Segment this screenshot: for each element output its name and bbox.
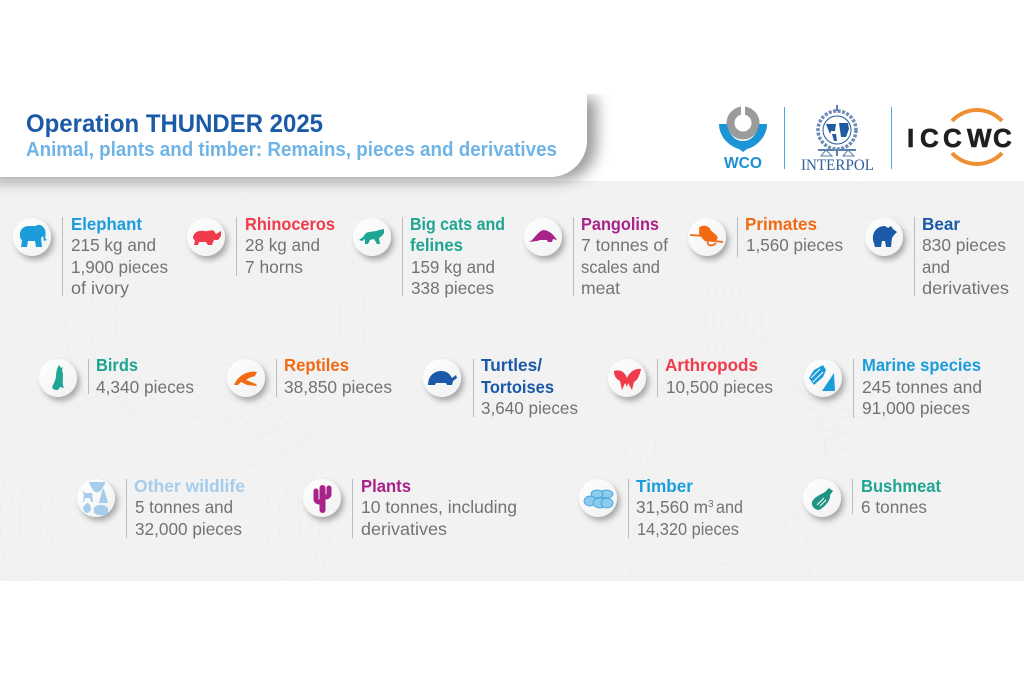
value: 31,560 m (636, 497, 708, 517)
value: 3 (708, 499, 714, 510)
label: Tortoises (481, 377, 554, 397)
icon: butterfly (614, 369, 641, 390)
divider (472, 359, 474, 417)
value (636, 497, 743, 539)
label: Turtles/ (481, 355, 542, 375)
item: Marine species (804, 355, 982, 418)
divider (402, 217, 404, 296)
label: Rhinoceros (245, 214, 335, 234)
value: derivatives (922, 278, 1009, 298)
divider (572, 217, 574, 296)
label: Marine species (862, 355, 981, 375)
value: 1,560 pieces (746, 235, 843, 255)
value: derivatives (361, 519, 447, 539)
icon: pangolin (529, 230, 557, 242)
icon: primate (690, 227, 723, 245)
value (71, 235, 168, 298)
value: 4,340 pieces (96, 377, 194, 397)
icon: elephant (20, 225, 47, 247)
label: Bear (922, 214, 960, 234)
icon: bird (52, 365, 64, 390)
logo: WCO: WCO (724, 155, 762, 172)
value: of ivory (71, 278, 129, 298)
divider (88, 359, 90, 394)
value (922, 235, 1009, 298)
divider (736, 217, 738, 257)
divider (628, 479, 630, 538)
value (135, 497, 242, 539)
icon: other wildlife (82, 482, 108, 515)
value: 32,000 pieces (135, 519, 242, 539)
label: Timber (636, 476, 693, 496)
value: 10,500 pieces (666, 377, 773, 397)
icon: timber logs (584, 490, 613, 508)
value: and (716, 497, 743, 517)
title: Operation THUNDER 2025 (26, 110, 323, 138)
label (481, 355, 554, 397)
icon: bushmeat (812, 488, 833, 510)
label: Primates (745, 214, 817, 234)
icon: cactus (316, 488, 329, 510)
label: Big cats and (410, 214, 505, 234)
grey content panel (0, 181, 1024, 581)
divider (126, 479, 128, 538)
value: 5 tonnes and (135, 497, 233, 517)
value (411, 257, 495, 298)
value: 338 pieces (411, 278, 494, 298)
logo: INTERPOL (801, 105, 874, 174)
value: 14,320 pieces (637, 519, 739, 539)
value: 245 tonnes and (862, 377, 982, 397)
item: Arthropods (608, 355, 773, 397)
label: Pangolins (581, 214, 659, 234)
divider (852, 479, 854, 514)
divider (276, 359, 278, 397)
label: Bushmeat (861, 476, 941, 496)
value (245, 235, 320, 277)
item: Rhinoceros (187, 214, 335, 277)
logo divider (784, 107, 785, 169)
value: and (922, 257, 950, 277)
value: 7 horns (245, 257, 303, 277)
value: 10 tonnes, including (361, 497, 517, 517)
item: Reptiles (227, 355, 392, 397)
icon: rhino (193, 230, 221, 245)
logo divider (891, 107, 892, 169)
value: meat (581, 278, 620, 298)
logo: WCO (719, 106, 767, 172)
item: Pangolins (524, 214, 668, 298)
label: Reptiles (284, 355, 349, 375)
value: 38,850 pieces (284, 377, 392, 397)
value: 215 kg and (71, 235, 156, 255)
divider (914, 217, 916, 296)
label: felines (410, 235, 463, 255)
value: 28 kg and (245, 235, 320, 255)
logo: INTERPOL: INTERPOL (801, 157, 874, 174)
item: Bushmeat (803, 476, 941, 517)
value (361, 497, 517, 539)
value: 7 tonnes of (581, 235, 668, 255)
label (410, 214, 505, 255)
value: scales and (581, 257, 660, 277)
item: Elephant (13, 214, 168, 298)
logo: ICCWC: ICCWC (907, 123, 1012, 153)
value: 159 kg and (411, 257, 495, 277)
value: 1,900 pieces (71, 257, 168, 277)
item: Timber (579, 476, 743, 539)
item: Bear (865, 214, 1009, 298)
value: 3,640 pieces (481, 398, 578, 418)
value (862, 377, 982, 418)
value: 91,000 pieces (862, 398, 970, 418)
divider (656, 359, 658, 397)
item: Turtles (423, 355, 578, 418)
label: Plants (361, 476, 411, 496)
logo: ICCWC (907, 110, 1012, 164)
header band (0, 94, 606, 190)
item: Big cats (353, 214, 505, 298)
divider (236, 217, 238, 276)
divider (852, 359, 854, 418)
divider (352, 479, 354, 538)
icon: reptile (234, 372, 257, 386)
icon: turtle (428, 371, 457, 385)
label: Birds (96, 355, 138, 375)
value (581, 235, 668, 298)
item: Primates (688, 214, 843, 257)
value: 830 pieces (922, 235, 1006, 255)
divider (62, 217, 64, 296)
value: 6 tonnes (861, 497, 927, 517)
icon: big cat (359, 229, 384, 244)
label: Elephant (71, 214, 142, 234)
item: Other wildlife (77, 476, 245, 539)
item: Plants (303, 476, 517, 539)
icon: marine (809, 365, 835, 391)
label: Arthropods (665, 355, 758, 375)
label: Other wildlife (134, 476, 245, 496)
icon: bear (873, 226, 897, 247)
item: Birds (39, 355, 194, 397)
subtitle: Animal, plants and timber: Remains, pieces and derivatives (26, 139, 557, 161)
header panel (0, 94, 587, 177)
